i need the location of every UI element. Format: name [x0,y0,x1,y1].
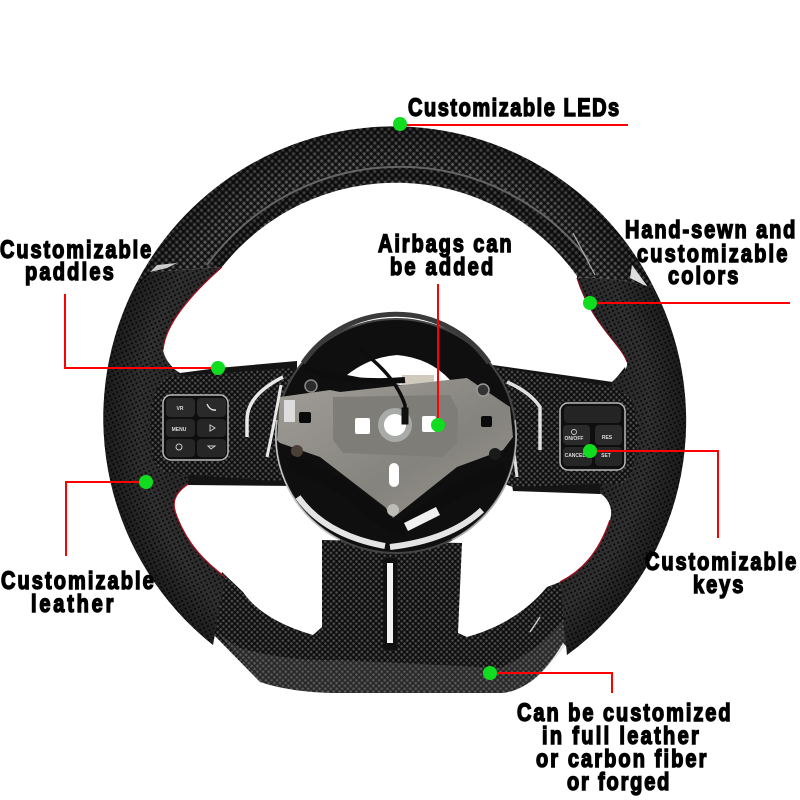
left carbon control plate [150,368,296,481]
callout: Customizable LEDs [393,94,628,131]
right button cluster: SET [601,453,611,459]
carbon top arc of rim [133,126,654,290]
wires [290,350,505,530]
right button cluster: ON/OFF [565,436,583,442]
left button cluster: VR [177,406,184,412]
callout: Customizable paddles [0,236,225,375]
carbon bottom of rim [209,540,572,693]
callout: Airbags can be added [378,230,512,432]
leather left rim [103,267,225,645]
left button cluster: MENU [172,427,187,433]
callout: Customizable leather: leather [31,590,114,618]
callout: Hand-sewn and customizable colors [583,216,795,310]
centre lower spoke slot [383,558,397,650]
white window above plate [347,355,450,385]
callout: Customizable leather [1,475,154,618]
callout: Customizable paddles: Customizable [0,236,151,264]
left spoke base [180,361,297,486]
callout: Can be customized: Can be customized [517,699,731,727]
callout: Customizable leather: Customizable [1,567,154,595]
callout: Hand-sewn and customizable colors: customizable [637,240,787,268]
callout: Can be customized: in full leather [542,722,699,750]
steering wheel [103,126,686,693]
callout: Can be customized [483,666,731,796]
callout: Hand-sewn and customizable colors: colors [668,262,738,290]
right carbon control plate [492,367,638,487]
left button cluster [163,395,228,460]
callout: Can be customized: or carbon fiber [536,745,707,773]
metal mounting plate [277,378,513,518]
right button cluster: RES [602,435,613,441]
callout: Airbags can be added: be added [390,253,493,281]
white barcode labels [298,497,482,547]
leather right rim [560,278,686,655]
central hub [276,314,516,553]
callout: Customizable keys [583,444,796,599]
callout: Customizable keys: keys [693,571,743,599]
callout: Customizable keys: Customizable [645,548,796,576]
callout: Customizable LEDs: Customizable LEDs [408,94,619,122]
callout: Can be customized: or forged [567,768,669,796]
right button cluster [560,403,625,470]
callout: Hand-sewn and customizable colors: Hand-sewn and [625,216,795,244]
right button cluster: CANCEL [565,453,585,459]
callout: Customizable paddles: paddles [25,258,114,286]
connector [402,375,434,392]
right spoke base [493,365,640,494]
callout: Airbags can be added: Airbags can [378,230,512,258]
